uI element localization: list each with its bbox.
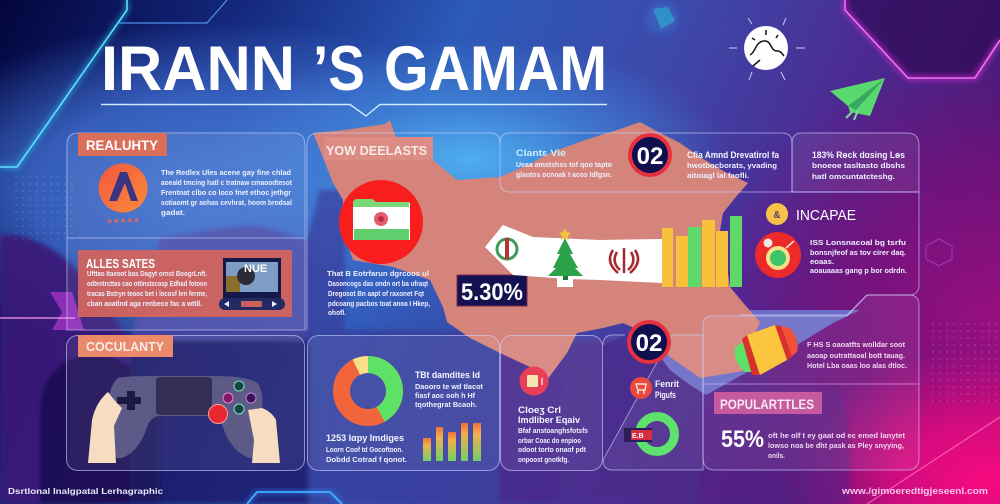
text block: top right [812, 150, 905, 181]
callout: alles sates: tracas Bstryn teooc bet i locosf len ferme, [87, 289, 207, 298]
text block: top center left [516, 148, 612, 179]
text block: block: Hotel Lba oaas loo alas dtloc. [807, 361, 907, 370]
text block: incapae: bonsnjfeof as tov cirer daq. [810, 248, 906, 257]
title: GAMAM [384, 34, 607, 104]
text block: narrow: Bfaf anstoanghsfotsfs [518, 426, 588, 435]
text block: popular titles: oft he olf t ey gaat od ec emed lanytet [768, 431, 906, 440]
text block: country: ohofl. [328, 308, 346, 317]
badge: 02 bottom [629, 322, 669, 362]
panel: top center [500, 133, 792, 192]
badge: 02 top: 02 [637, 143, 663, 170]
faint crystal top [646, 2, 678, 34]
callout: alles sates: cban aoatlnd aga renbeco fac a wttll. [87, 299, 202, 308]
text block: narrow [518, 405, 588, 464]
text block: block [807, 340, 907, 370]
text block: donut lower [326, 433, 407, 464]
panel: narrow text [500, 336, 602, 470]
heading: incapae: INCAPAE [796, 207, 856, 224]
callout: alles sates [78, 250, 292, 317]
heading: yow deelasts [324, 137, 433, 160]
text block: popular titles [768, 431, 906, 460]
footer left: Dsrtlonal Inalgpatal Lerhagraphic [8, 486, 163, 496]
text block: realuhty: sotiaomt gr aohas cevhrat, hoom brodsal [161, 198, 292, 207]
text block: incapae: ISS Lonsnacoal bg tsrfu [810, 238, 906, 247]
text block: top center left: Ueaa amstshss tof qoo tapto [516, 160, 612, 169]
callout: alles sates: odtentrcttas cao ottinstscasp Edhad fotoon [87, 279, 207, 288]
text block: top center right: hwotbocborats, yvading [687, 161, 777, 170]
clock icon [729, 18, 805, 80]
panel: country details [307, 133, 500, 330]
dot pattern left [15, 175, 75, 240]
text block: realuhty [161, 168, 292, 217]
panel: lower left controller [66, 336, 304, 470]
panel divider right [703, 383, 919, 385]
text block: donut right: fiasf aoc ooh h Hf [415, 391, 475, 400]
icon: game controller [88, 376, 280, 463]
text block: incapae [810, 238, 907, 275]
dot pattern right [930, 320, 1000, 405]
heading: incapae [766, 203, 856, 225]
icon: block [735, 325, 798, 375]
text block: block: aaoap outrattaoal bott tauag. [807, 351, 905, 360]
text block: top center left: glaotos ocnoak t acos Idfgsn. [516, 170, 612, 179]
neon line: pink diagonal [867, 417, 1000, 504]
text block: block: F HS S oaoatfts wolldar soot [807, 340, 905, 349]
text block: country: pdcoang pacbos toat anoa I Hkep, [328, 299, 430, 308]
bar chart: bottom [423, 423, 481, 461]
heading: coculanty [78, 335, 173, 357]
text block: popular titles: lowso noa be dht pask as Pley snyying, [768, 441, 904, 450]
text block: top center right [687, 150, 780, 180]
icon: A logo [98, 164, 148, 226]
text block: top center right: aitoiagl lal faofli. [687, 171, 749, 180]
heading: realuhty: REALUHTY [86, 138, 158, 153]
text block: incapae: aoauaaas gang p bor odrdn. [810, 266, 907, 275]
text block: realuhty: Frentnat clbo co loco fnet ethoc jethgr [161, 188, 291, 197]
panel: donut [308, 336, 500, 470]
text block: cart [655, 379, 679, 400]
flag banner [485, 225, 662, 283]
dark background shapes [0, 190, 850, 504]
text block: top right: hatl omcuntatcteshg. [812, 172, 895, 181]
text block: country: Dregosot Bn aapt of raxonet Fqt [328, 289, 424, 298]
text block: top center right: Cfia Amnd Drevatirol fa [687, 150, 780, 160]
callout: alles sates: ALLES SATES [86, 257, 155, 271]
panel: popular titles [703, 295, 919, 470]
text block: realuhty: aoeald tmcing hatl c tratnaw cmaoodtesot [161, 178, 292, 187]
text block: narrow: Cloeʒ Crl [518, 405, 561, 415]
icon: tree [548, 228, 583, 287]
icon: Iran flag [339, 180, 423, 264]
text block: cart: Fenrit [655, 379, 679, 389]
heading: coculanty: COCULANTY [86, 340, 165, 354]
panel divider left [67, 237, 305, 239]
badge: 02 bottom: 02 [636, 330, 662, 357]
map of Iran [313, 120, 860, 395]
neon line: cyan top left [0, 0, 227, 167]
donut chart [333, 356, 403, 426]
heading: popular titles [714, 392, 822, 414]
text block: top right: 183% Rɵck dɑsing Lɵs [812, 150, 905, 160]
text block: country [327, 269, 430, 317]
text block: donut right: tqothegrat Bcaoh. [415, 400, 477, 409]
footer right: www./gimoeredtigjeseenl.com [841, 486, 988, 496]
panel: upper left [67, 133, 305, 330]
text block: country: That B Eotrfarun dgrcoos ul [327, 269, 429, 278]
text block: narrow: orbar Coac do enpioo [518, 436, 581, 445]
heading: realuhty [78, 133, 167, 156]
text block: popular titles: onils. [768, 451, 785, 460]
icon: laptop game [219, 258, 285, 310]
text block: top right: bnoeoe tasltasto dbshs [812, 161, 905, 170]
faint hexagon icon [926, 239, 952, 266]
bar chart: map [662, 216, 742, 287]
text block: donut right [415, 370, 483, 409]
heading: incapae: & [773, 210, 781, 221]
icon: green ring: E.B [632, 433, 644, 440]
title: IRANN [101, 34, 295, 104]
icon: A logo: ★★★★★ [106, 215, 140, 226]
text block: donut right: Daooro te wd tlacot [415, 382, 483, 391]
panel: income [740, 192, 919, 315]
neon line: blue bottom [247, 492, 342, 504]
text block: incapae: eoaas. [810, 257, 834, 266]
text block: donut lower: Dobdd Cotrad f qonot. [326, 455, 407, 464]
panel: top right [792, 133, 919, 192]
text block: narrow: Imdliber Eqaiv [518, 415, 580, 425]
icon: green ring [624, 416, 674, 452]
icon: cart [630, 377, 652, 399]
text block: cart: Pigufs [655, 390, 676, 400]
neon line: magenta left [0, 292, 84, 330]
text block: top center left: Clantɛ Vie [516, 148, 566, 158]
text block: donut right: TBt damdites ld [415, 370, 480, 380]
paper plane icon [830, 78, 885, 120]
neon hexagon: magenta top right [845, 0, 1000, 78]
panel: ring [603, 335, 703, 470]
title [101, 34, 607, 116]
text block: country: Dasoncogs das ondn ort ba ufraqt [328, 279, 428, 288]
heading: yow deelasts: YOW DEELASTS [326, 143, 427, 158]
title: ’S [313, 34, 365, 104]
badge: 02 top [630, 135, 670, 175]
stat: 55%: 55% [721, 426, 764, 453]
heading: popular titles: POPULARTTLES [720, 397, 814, 412]
text block: donut lower: Loorn Coof td Gocoftoon. [326, 445, 403, 454]
text block: narrow: onpoost gnotkfg. [518, 455, 569, 464]
text block: donut lower: 1253 Iαpy Imdiges [326, 433, 404, 443]
text block: realuhty: gadat. [161, 208, 185, 217]
icon: red coin [755, 232, 801, 278]
callout: alles sates: Ufttao Itaeoot bas Dagyt ornst BoogrLnft. [87, 269, 207, 278]
text block: realuhty: The Redlex Ules acene gay fine chlad [161, 168, 291, 177]
stat: 5.30%: 5.30% [461, 279, 523, 306]
icon: red square [520, 366, 548, 396]
text block: narrow: odoot torto onaof pdt [518, 445, 586, 454]
icon: laptop game: NUE [244, 263, 267, 275]
